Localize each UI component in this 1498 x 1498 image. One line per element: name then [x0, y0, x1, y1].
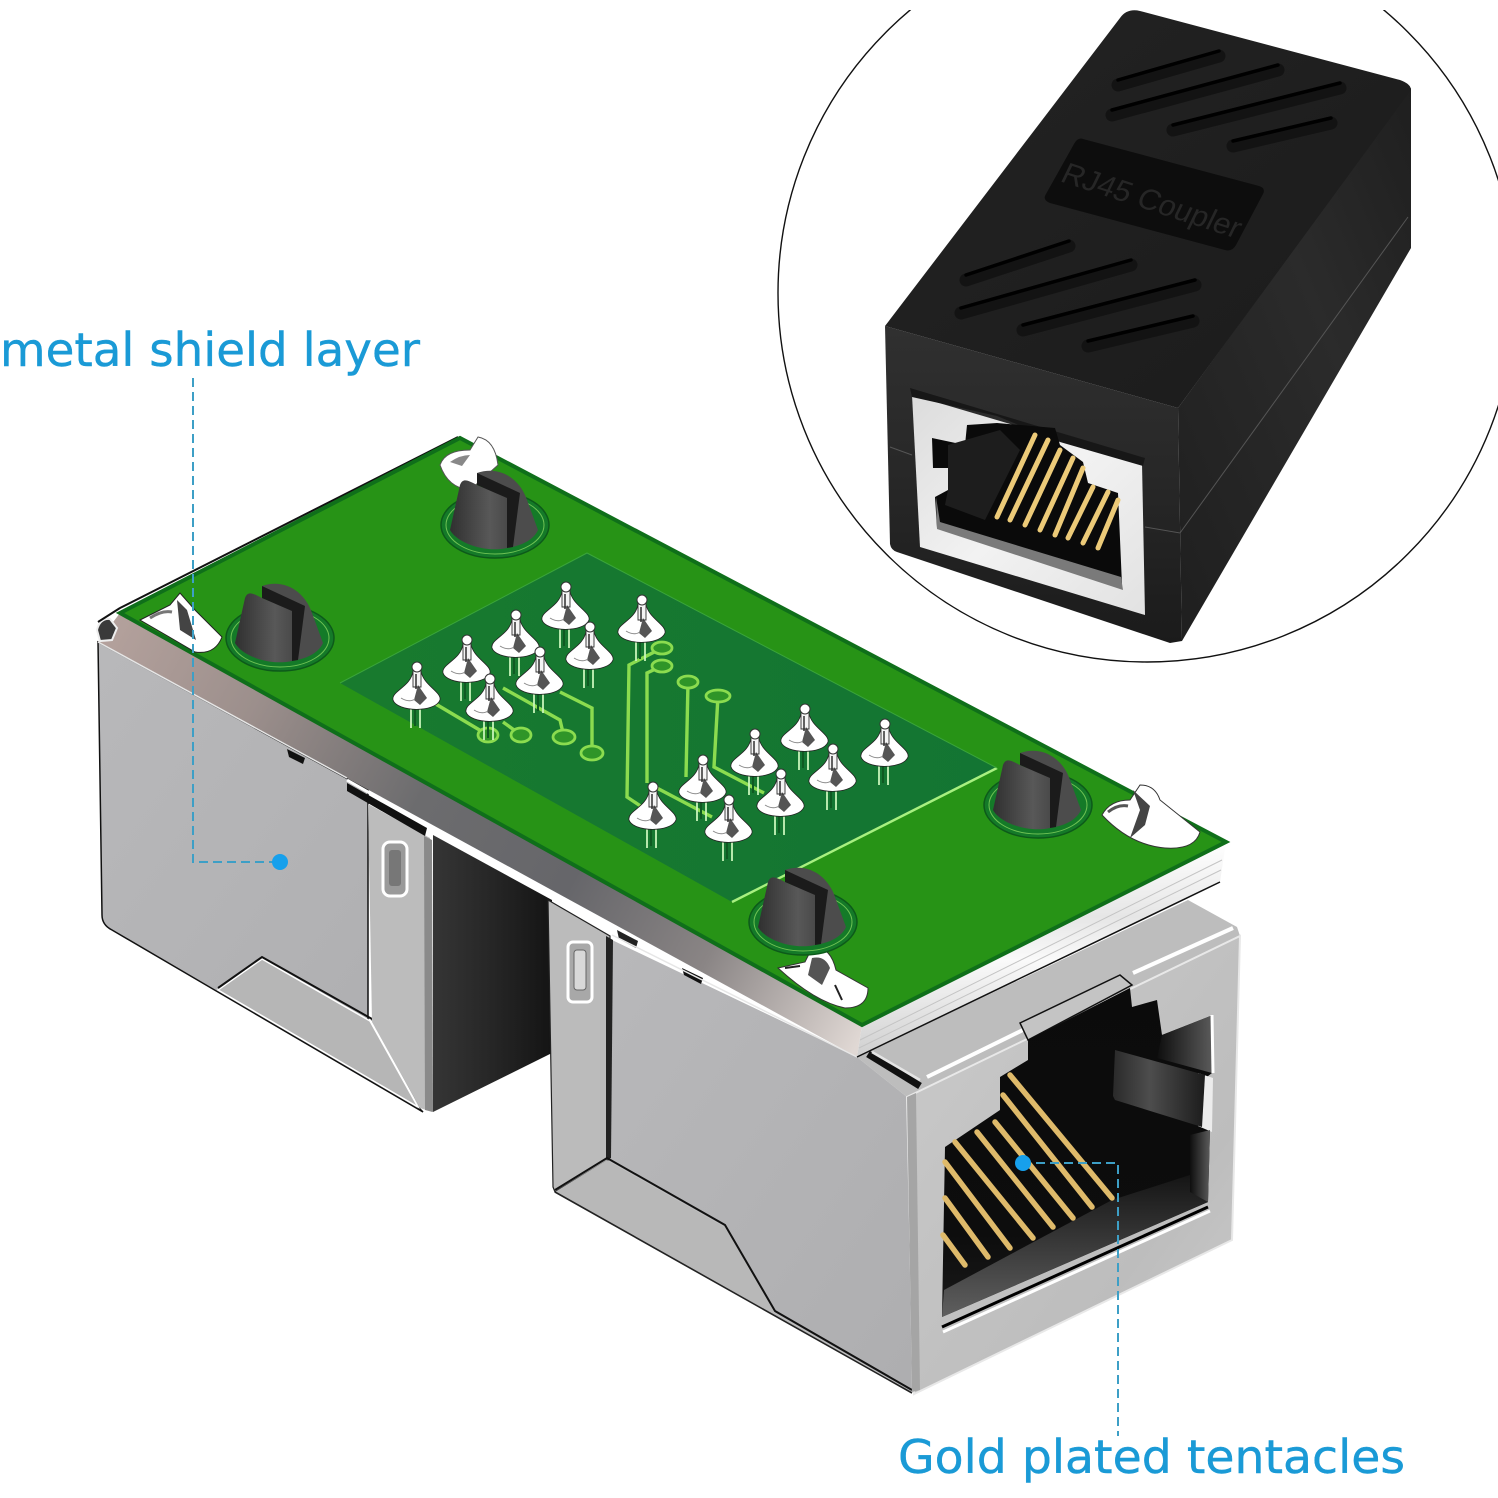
left shield side panel — [98, 642, 423, 1112]
callout: metal shield layer — [0, 323, 420, 870]
heading: gold plated tentacles: Gold plated tentacles — [898, 1430, 1405, 1484]
heading: metal shield layer: metal shield layer — [0, 323, 420, 377]
circuit board — [97, 437, 1226, 1057]
copper traces — [434, 642, 764, 817]
right side panel — [607, 940, 912, 1392]
solder pins right group — [629, 704, 908, 861]
metal band under board — [98, 613, 862, 1057]
upper window — [1157, 1015, 1213, 1073]
right port opening — [942, 988, 1213, 1332]
latch — [1113, 1050, 1205, 1127]
inset circle outline — [778, 0, 1498, 662]
leader line — [193, 378, 280, 862]
callout: gold plated tentacles — [898, 1155, 1405, 1484]
board white edge — [857, 842, 1226, 1057]
dark green circuit panel — [340, 553, 997, 902]
port floor — [942, 1175, 1208, 1317]
silver port bezel — [912, 395, 1145, 615]
solder pins left group — [393, 582, 665, 740]
right metal module — [548, 900, 1240, 1394]
green board surface — [120, 438, 1226, 1025]
leader dot — [272, 854, 288, 870]
right inner wall — [1190, 1130, 1210, 1202]
inset: product photo circle — [778, 0, 1498, 662]
gold pins large port — [943, 1075, 1112, 1265]
right bridge — [1198, 1073, 1213, 1132]
mounting post 1 — [226, 584, 334, 671]
right notch panel — [555, 1160, 912, 1392]
coupler front face — [885, 326, 1182, 643]
mounting post 2 — [441, 471, 549, 558]
mounting post 3 — [984, 751, 1092, 838]
left metal module — [98, 642, 552, 1112]
right side tab — [548, 900, 703, 1192]
left notch panel — [218, 959, 418, 1107]
gold pins small port — [997, 435, 1118, 548]
black coupler body — [885, 10, 1411, 643]
recess between modules — [433, 835, 552, 1112]
corner solder joints — [140, 437, 1200, 1008]
corner clip — [97, 619, 117, 641]
port opening — [932, 423, 1122, 585]
leader dot — [1015, 1155, 1031, 1171]
coupler right face — [1178, 88, 1411, 641]
right top strip — [857, 900, 1240, 1097]
left side tab with window — [287, 749, 433, 1112]
leader line — [1022, 1163, 1118, 1436]
coupler top face with vents — [885, 10, 1411, 408]
label plate — [1045, 139, 1264, 250]
right front face — [907, 936, 1240, 1394]
label plate: RJ45 Coupler — [1056, 158, 1247, 245]
mounting post 4 — [749, 868, 857, 955]
